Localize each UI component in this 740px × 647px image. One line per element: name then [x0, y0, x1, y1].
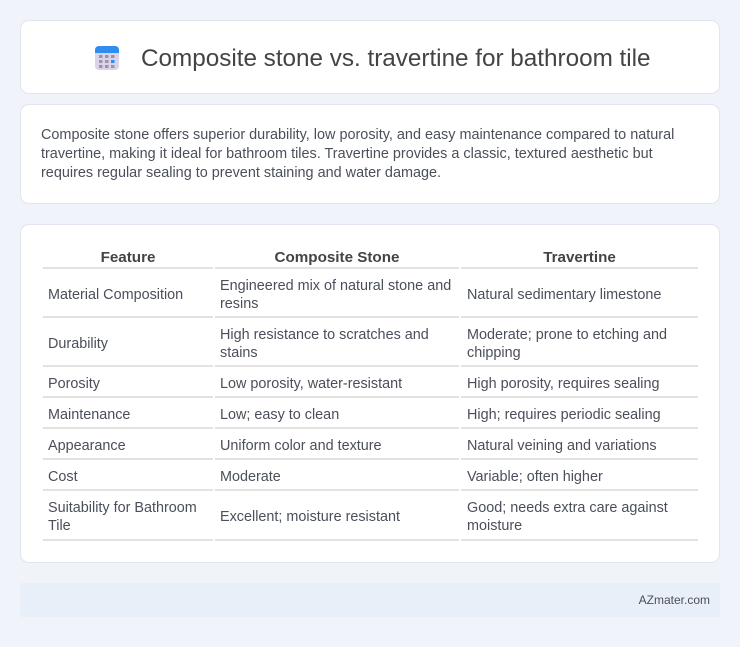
row: material composition: Material Composition [48, 287, 183, 303]
comparison table: Moderate; prone to etching and [467, 327, 667, 343]
intro text: requires regular sealing to prevent staining and water damage. [41, 165, 441, 181]
comparison table: Low porosity, water-resistant [220, 376, 402, 392]
comparison table: resins [220, 296, 258, 312]
row: porosity: Porosity [48, 376, 100, 392]
comparison table: Good; needs extra care against [467, 500, 668, 516]
row: durability: Durability [48, 336, 108, 352]
footer credit: AZmater.com [639, 593, 710, 607]
comparison table: Variable; often higher [467, 469, 603, 485]
comparison table: stains [220, 345, 258, 361]
row: cost: Cost [48, 469, 78, 485]
comparison table: Natural veining and variations [467, 438, 657, 454]
intro text: Composite stone offers superior durability, low porosity, and easy maintenance compared to natural [41, 127, 674, 143]
comparison table: Uniform color and texture [220, 438, 382, 454]
comparison table: High porosity, requires sealing [467, 376, 660, 392]
header: composite stone: Composite Stone [275, 249, 399, 266]
icon: calendar [95, 46, 119, 70]
header: feature: Feature [101, 249, 155, 266]
comparison table panel [20, 224, 720, 563]
comparison table: Tile [48, 518, 71, 534]
comparison table: High resistance to scratches and [220, 327, 429, 343]
comparison table: High; requires periodic sealing [467, 407, 661, 423]
comparison table: Excellent; moisture resistant [220, 509, 400, 525]
header: travertine: Travertine [543, 249, 616, 266]
comparison table: Moderate [220, 469, 281, 485]
intro panel [20, 104, 720, 204]
comparison table: moisture [467, 518, 522, 534]
comparison table: Engineered mix of natural stone and [220, 278, 451, 294]
intro text: travertine, making it ideal for bathroom tiles. Travertine provides a classic, textured aesthetic but [41, 146, 653, 162]
footer bar [20, 583, 720, 617]
row: appearance: Appearance [48, 438, 126, 454]
comparison table: Low; easy to clean [220, 407, 339, 423]
row: suitability for bathroom tile: Suitability for Bathroom [48, 500, 197, 516]
comparison table: chipping [467, 345, 521, 361]
title: Composite stone vs. travertine for bathroom tile [141, 45, 651, 72]
header panel [20, 20, 720, 94]
row: maintenance: Maintenance [48, 407, 130, 423]
intro text [41, 127, 674, 181]
comparison table: Natural sedimentary limestone [467, 287, 661, 303]
